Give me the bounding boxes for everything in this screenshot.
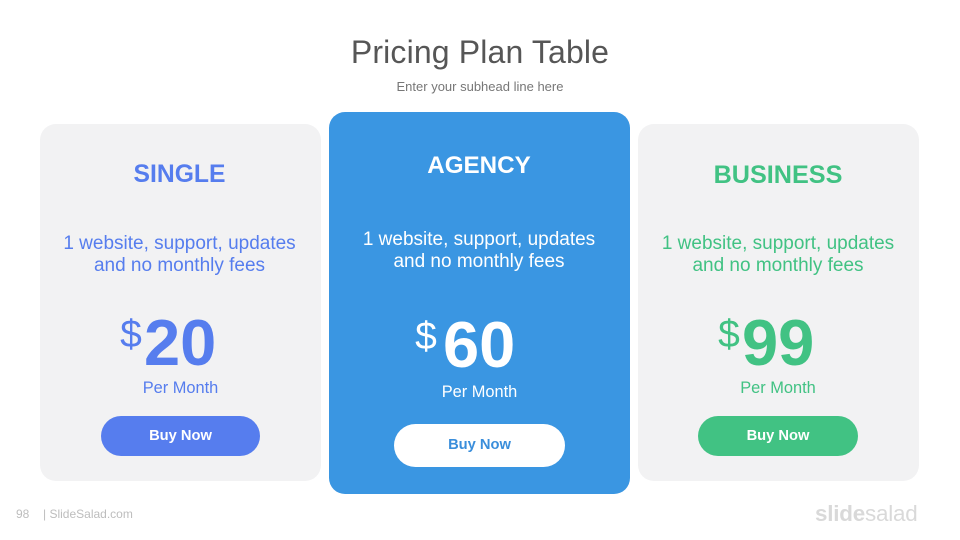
description: single [63, 233, 296, 276]
button: business: Buy Now [747, 428, 809, 444]
description: business [662, 233, 894, 276]
button: agency [394, 424, 565, 467]
logo: slidesalad: slidesalad [815, 501, 918, 526]
currency symbol: $ [718, 313, 740, 356]
description: agency: and no monthly fees [393, 251, 565, 272]
description: single: 1 website, support, updates [63, 233, 296, 254]
billing period: agency: Per Month [442, 383, 517, 401]
button: single: Buy Now [149, 428, 212, 444]
button: business [698, 416, 858, 456]
page number: 98 [16, 507, 29, 521]
plan name: agency: AGENCY [427, 152, 531, 179]
currency symbol: $ [415, 315, 437, 358]
panel: single plan [40, 124, 321, 481]
plan name: single: SINGLE [134, 161, 225, 188]
button: agency: Buy Now [448, 437, 511, 453]
description: agency [363, 229, 595, 272]
price: business [718, 306, 814, 379]
button: single [101, 416, 260, 456]
currency symbol: $ [120, 313, 142, 356]
billing period: single: Per Month [143, 379, 218, 397]
footer source: | SlideSalad.com [43, 507, 133, 521]
price: single [120, 306, 216, 379]
panel: agency plan [329, 112, 630, 494]
description: agency: 1 website, support, updates [363, 229, 595, 250]
panel: business plan [638, 124, 919, 481]
description: business: 1 website, support, updates [662, 233, 894, 254]
description: business: and no monthly fees [692, 255, 864, 276]
subhead: Enter your subhead line here [397, 79, 563, 94]
plan name: business: BUSINESS [714, 161, 842, 189]
price: agency [415, 308, 515, 381]
amount: 60 [443, 308, 515, 381]
amount: 20 [144, 306, 216, 379]
description: single: and no monthly fees [94, 255, 265, 276]
amount: 99 [742, 306, 814, 379]
title: Pricing Plan Table [351, 34, 609, 70]
billing period: business: Per Month [740, 379, 816, 397]
